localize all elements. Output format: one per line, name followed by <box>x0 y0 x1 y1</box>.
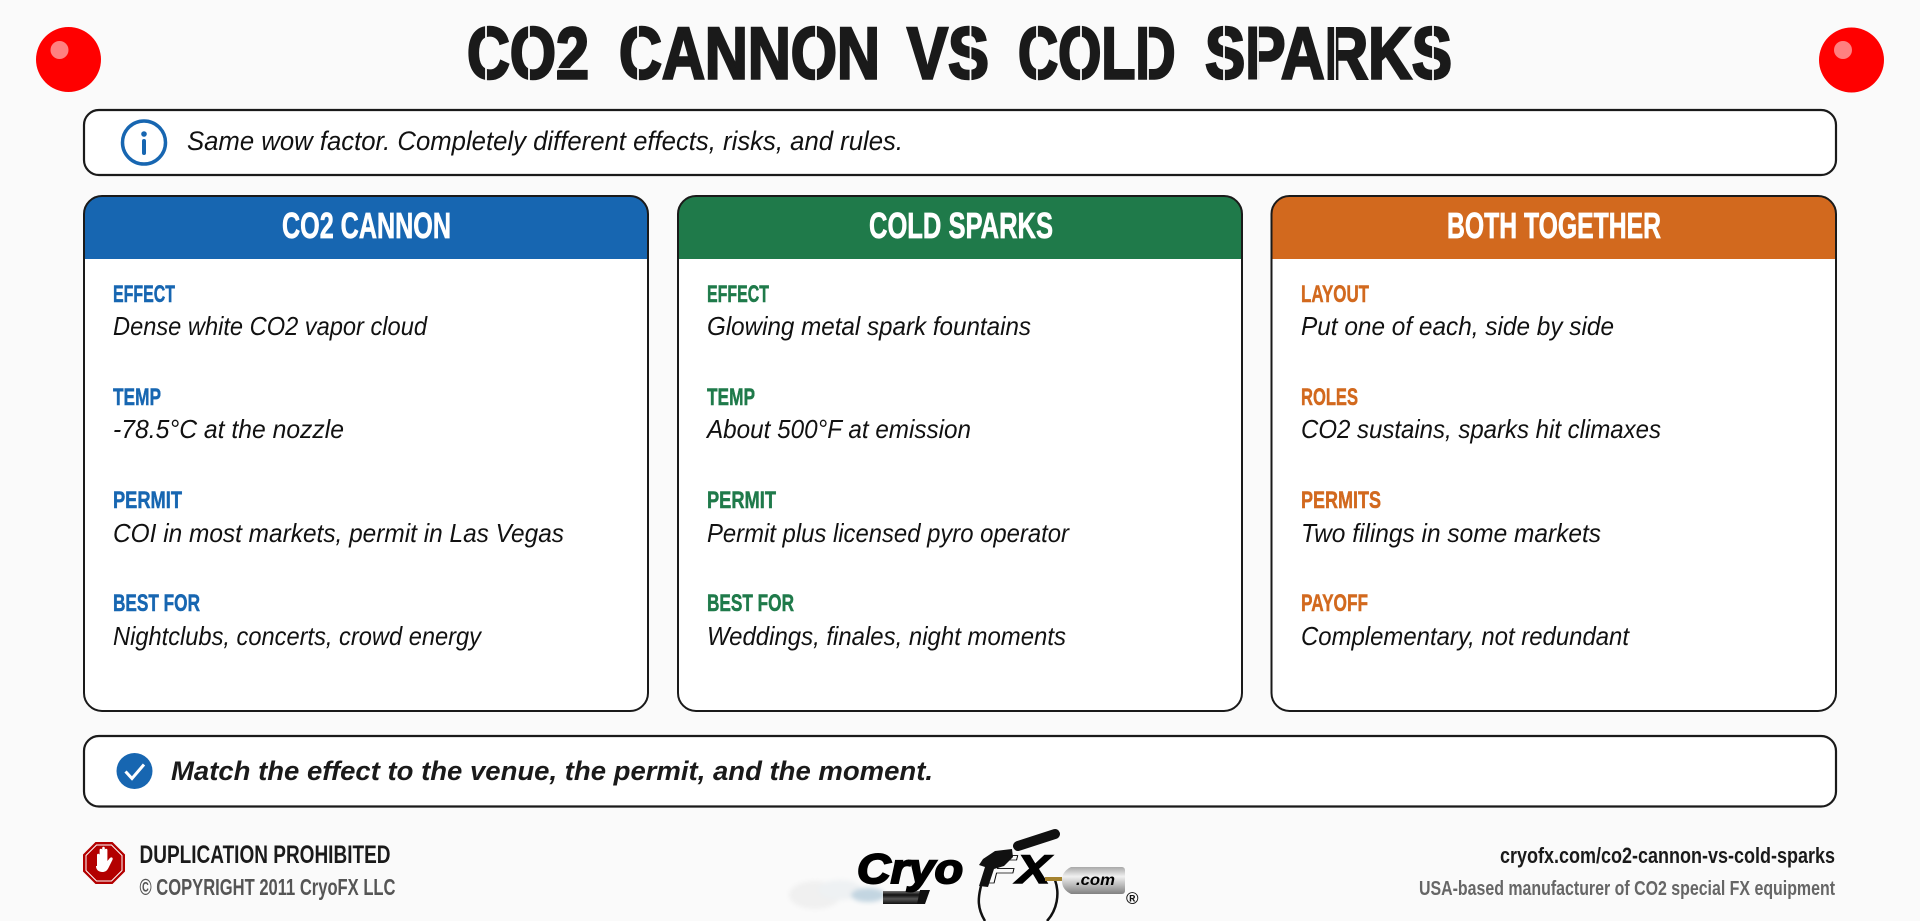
row: roles: CO2 sustains, sparks hit climaxes <box>1301 414 1661 444</box>
title: CANNON <box>619 14 880 94</box>
title: SPARKS <box>1205 14 1452 94</box>
row: permits: Two filings in some markets <box>1301 518 1601 548</box>
icon: right red light <box>1819 28 1884 92</box>
panel: CO2 cannon <box>84 196 648 711</box>
row: permit: PERMIT <box>113 487 182 514</box>
row: temp: TEMP <box>113 384 161 411</box>
row: best for: Weddings, finales, night moments <box>707 621 1066 651</box>
icon: left red light <box>36 27 101 92</box>
row: effect: Glowing metal spark fountains <box>707 311 1031 341</box>
footer: duplication notice: DUPLICATION PROHIBITED <box>140 841 390 869</box>
title: COLD <box>1018 14 1176 94</box>
row: best for: Nightclubs, concerts, crowd energy <box>113 621 483 651</box>
row: best for <box>707 590 1066 651</box>
row: temp <box>113 384 344 444</box>
row: roles: ROLES <box>1301 384 1358 411</box>
row: payoff: Complementary, not redundant <box>1301 621 1631 651</box>
row: layout: LAYOUT <box>1301 281 1369 308</box>
logo: CryoFX: FX <box>986 848 1053 892</box>
title: VS <box>907 14 989 94</box>
logo: CryoFX <box>789 834 1139 921</box>
row: best for: BEST FOR <box>707 590 794 617</box>
row: permit <box>113 487 564 548</box>
row: effect <box>707 281 1031 341</box>
row: payoff: PAYOFF <box>1301 590 1368 617</box>
row: temp: -78.5°C at the nozzle <box>113 414 344 444</box>
logo tank <box>1062 867 1125 894</box>
row: permits: PERMITS <box>1301 487 1381 514</box>
row: effect: Dense white CO2 vapor cloud <box>113 311 428 341</box>
icon: check <box>116 753 152 789</box>
heading: CO2 cannon: CO2 CANNON <box>282 205 451 246</box>
panel: takeaway banner <box>84 736 1836 806</box>
logo: CryoFX: ® <box>1126 889 1139 908</box>
footer: copyright: © COPYRIGHT 2011 CryoFX LLC <box>140 874 396 900</box>
row: best for <box>113 590 483 651</box>
row: permit <box>707 487 1070 548</box>
row: permit: Permit plus licensed pyro operator <box>707 518 1070 548</box>
row: temp: About 500°F at emission <box>705 414 971 444</box>
row: effect: EFFECT <box>707 281 769 308</box>
row: effect: EFFECT <box>113 281 175 308</box>
row: payoff <box>1301 590 1631 651</box>
takeaway text: Match the effect to the venue, the permit, and the moment. <box>171 756 933 786</box>
logo cloud <box>789 880 885 909</box>
icon: stop hand <box>83 842 125 884</box>
intro text: Same wow factor. Completely different effects, risks, and rules. <box>187 126 903 156</box>
logo wordmark: Cryo <box>857 845 963 892</box>
panel: both together <box>1272 196 1836 711</box>
icon: info <box>122 121 166 164</box>
row: layout: Put one of each, side by side <box>1301 311 1614 341</box>
row: permits <box>1301 487 1601 548</box>
row: layout <box>1301 281 1614 341</box>
row: roles <box>1301 384 1661 444</box>
logo: CryoFX: .com <box>1076 872 1115 889</box>
row: permit: COI in most markets, permit in Las Vegas <box>113 518 564 548</box>
row: temp <box>705 384 971 444</box>
footer: page URL: cryofx.com/co2-cannon-vs-cold-sparks <box>1500 843 1835 868</box>
title <box>467 14 1452 94</box>
row: temp: TEMP <box>707 384 755 411</box>
title: CO2 <box>467 14 589 94</box>
heading: both together: BOTH TOGETHER <box>1447 205 1661 246</box>
heading: cold sparks: COLD SPARKS <box>869 205 1053 246</box>
row: best for: BEST FOR <box>113 590 200 617</box>
panel: cold sparks <box>678 196 1242 711</box>
row: effect <box>113 281 428 341</box>
panel: intro banner <box>84 110 1836 175</box>
row: permit: PERMIT <box>707 487 776 514</box>
